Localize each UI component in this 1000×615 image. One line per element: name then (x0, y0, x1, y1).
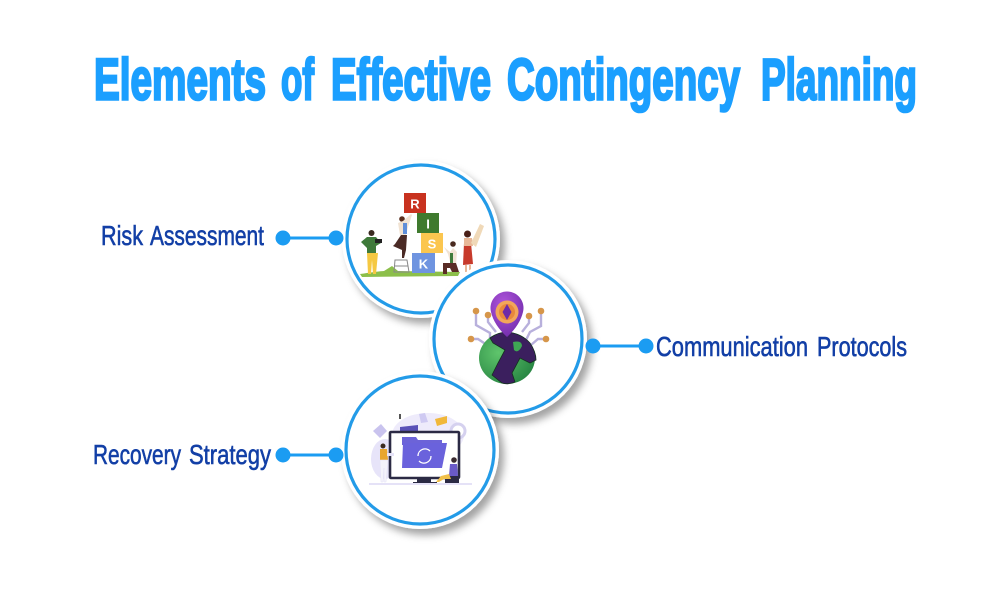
label: recovery strategy: Recovery (93, 439, 181, 470)
label: risk assessment: Risk (101, 220, 144, 251)
icon: risk blocks with people: I (426, 216, 430, 232)
title: of (281, 48, 314, 112)
icon: risk blocks with people: R (410, 196, 420, 212)
icon: risk blocks with people: S (428, 236, 437, 252)
title: Contingency (507, 48, 740, 112)
panel: recovery strategy circle (341, 371, 499, 529)
label: risk assessment (101, 220, 264, 251)
title (94, 48, 917, 112)
label: risk assessment: Assessment (150, 220, 264, 251)
icon: risk blocks with people: K (419, 256, 429, 272)
icon: monitor with folder and people (369, 413, 472, 485)
label: communication protocols: Communication (656, 331, 808, 362)
title: Effective (331, 48, 491, 112)
panel: communication protocols circle (429, 260, 587, 418)
panel: risk assessment circle (342, 160, 500, 318)
connector: risk assessment (276, 230, 344, 246)
connector: recovery strategy (276, 448, 344, 462)
title: Planning (761, 48, 917, 112)
label: recovery strategy (93, 439, 271, 470)
title: Elements (94, 48, 266, 112)
label: communication protocols: Protocols (817, 331, 907, 362)
connector: communication protocols (586, 338, 654, 354)
icon: globe with location pin (468, 291, 549, 384)
label: recovery strategy: Strategy (189, 439, 271, 470)
icon: risk blocks with people (360, 193, 484, 277)
